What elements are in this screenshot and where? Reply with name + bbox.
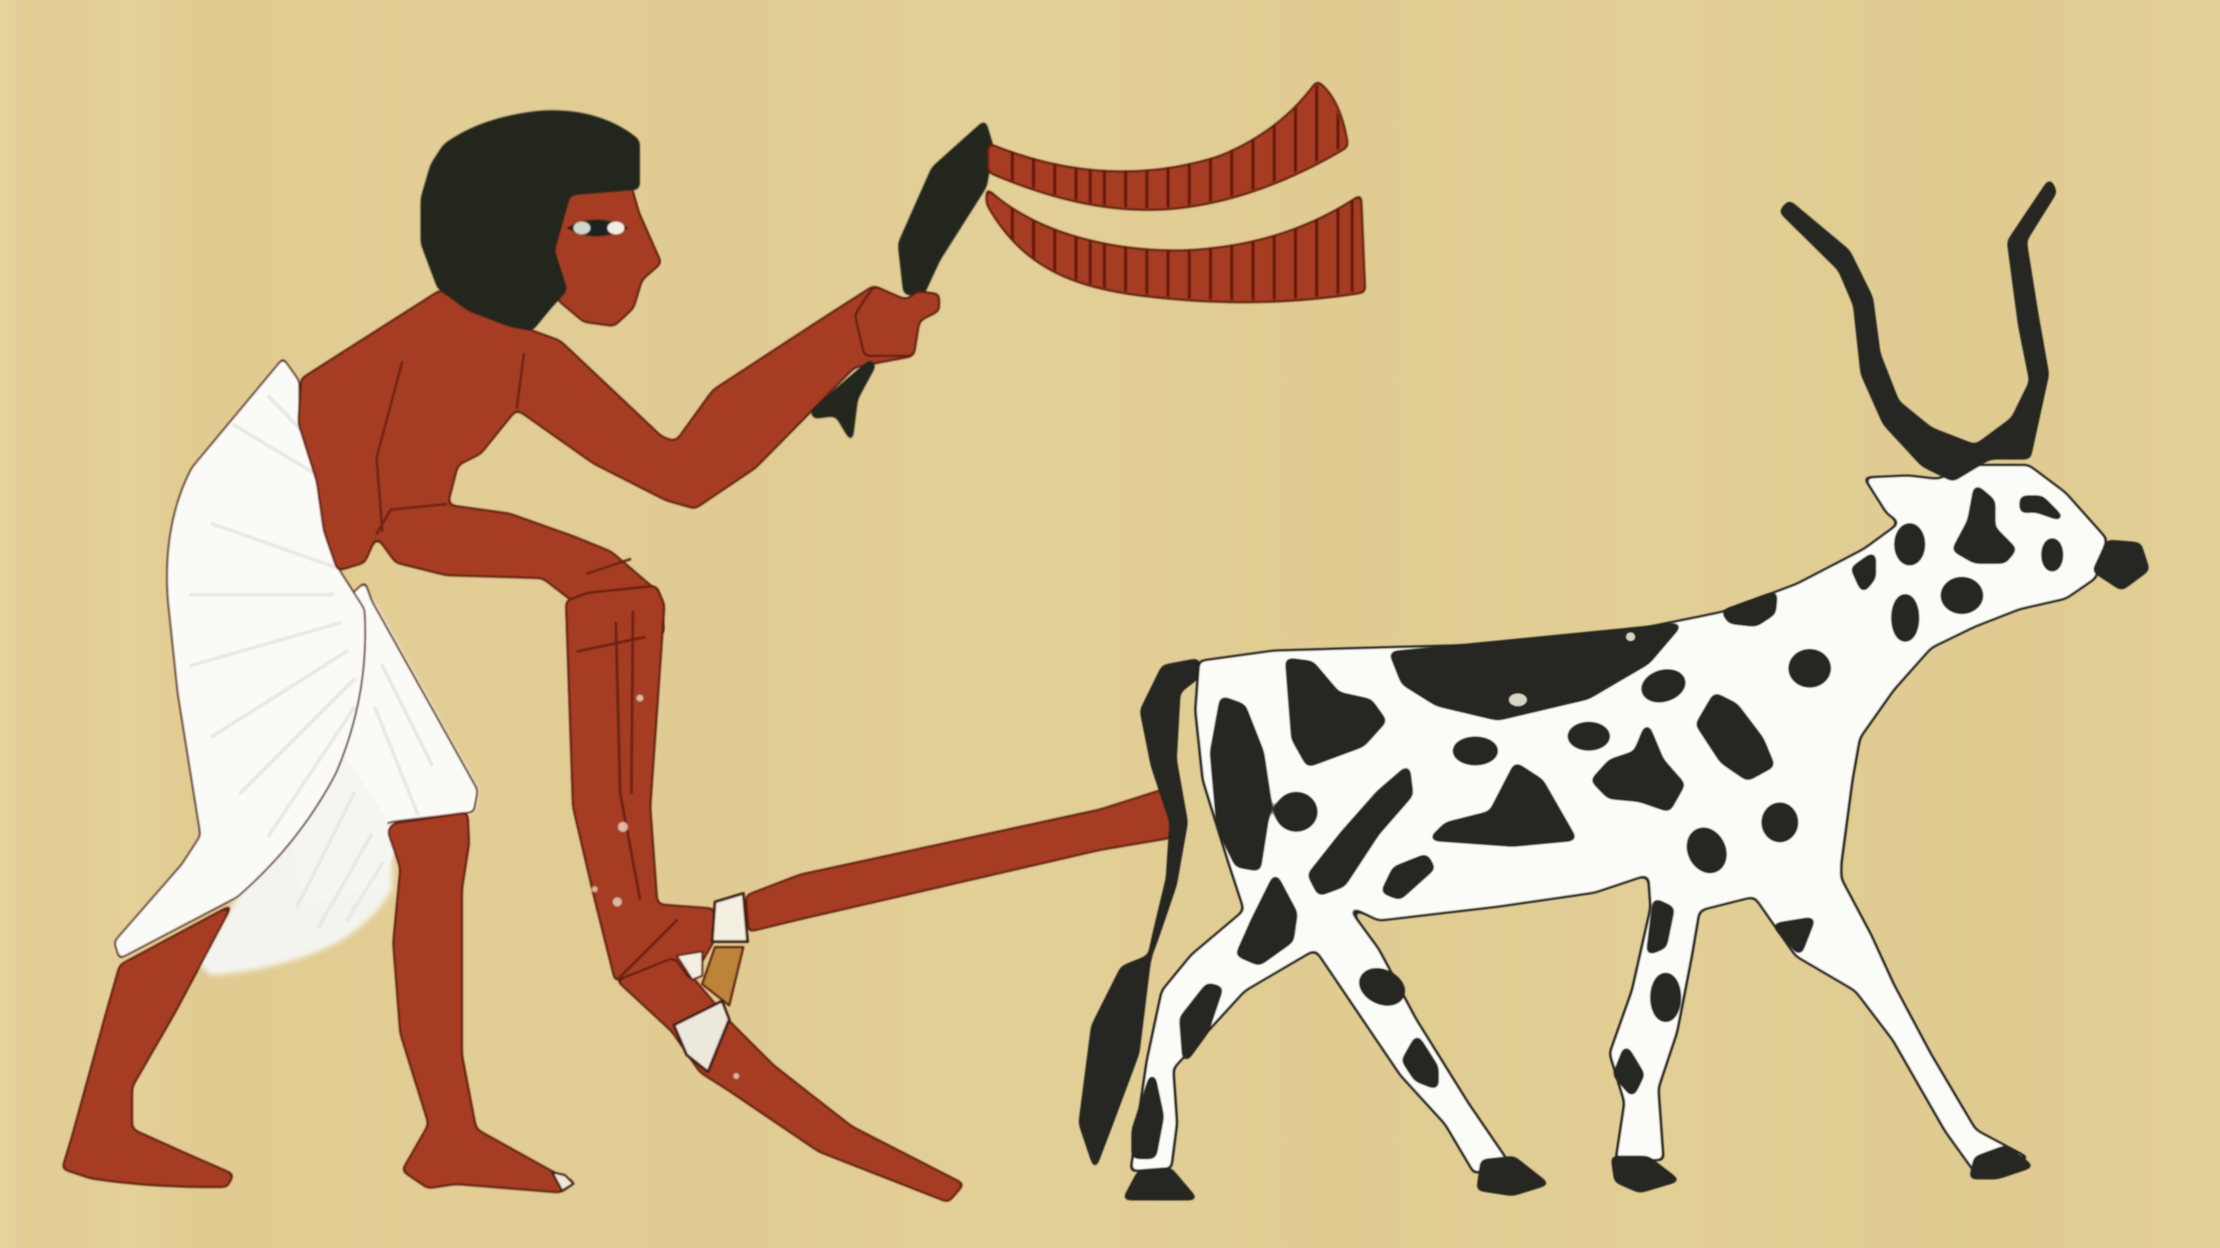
white binding on blade [674,1001,729,1072]
white wedge [677,951,702,980]
whip handle [810,119,994,445]
ox tail [1078,658,1203,1172]
ox muzzle [2092,539,2150,591]
back leg [61,902,235,1188]
face [552,183,663,327]
share and blade [614,953,966,1203]
figure: farmer [61,79,1366,1194]
tan lashing [702,947,743,1005]
hair [420,110,640,331]
paint flecks [592,695,739,1079]
ox body [1129,464,2108,1175]
kilt: white pleated cloth [113,357,479,976]
eye [566,219,629,236]
beam [745,787,1175,933]
handle grain [578,612,677,977]
ox hooves [1122,1144,2035,1200]
front leg [387,811,578,1194]
white binding on beam [712,893,748,942]
ox horns [1778,177,2057,482]
hand on whip [854,285,940,357]
torso and arms [297,285,915,646]
ox spots [1135,489,2060,1156]
toenail [552,1172,573,1191]
plough [565,585,1175,1203]
back highlight flecks [1509,633,1635,706]
arm contour lines [377,354,644,609]
whip tails [985,79,1366,304]
handle [565,585,715,983]
figure: ox [1078,177,2150,1200]
